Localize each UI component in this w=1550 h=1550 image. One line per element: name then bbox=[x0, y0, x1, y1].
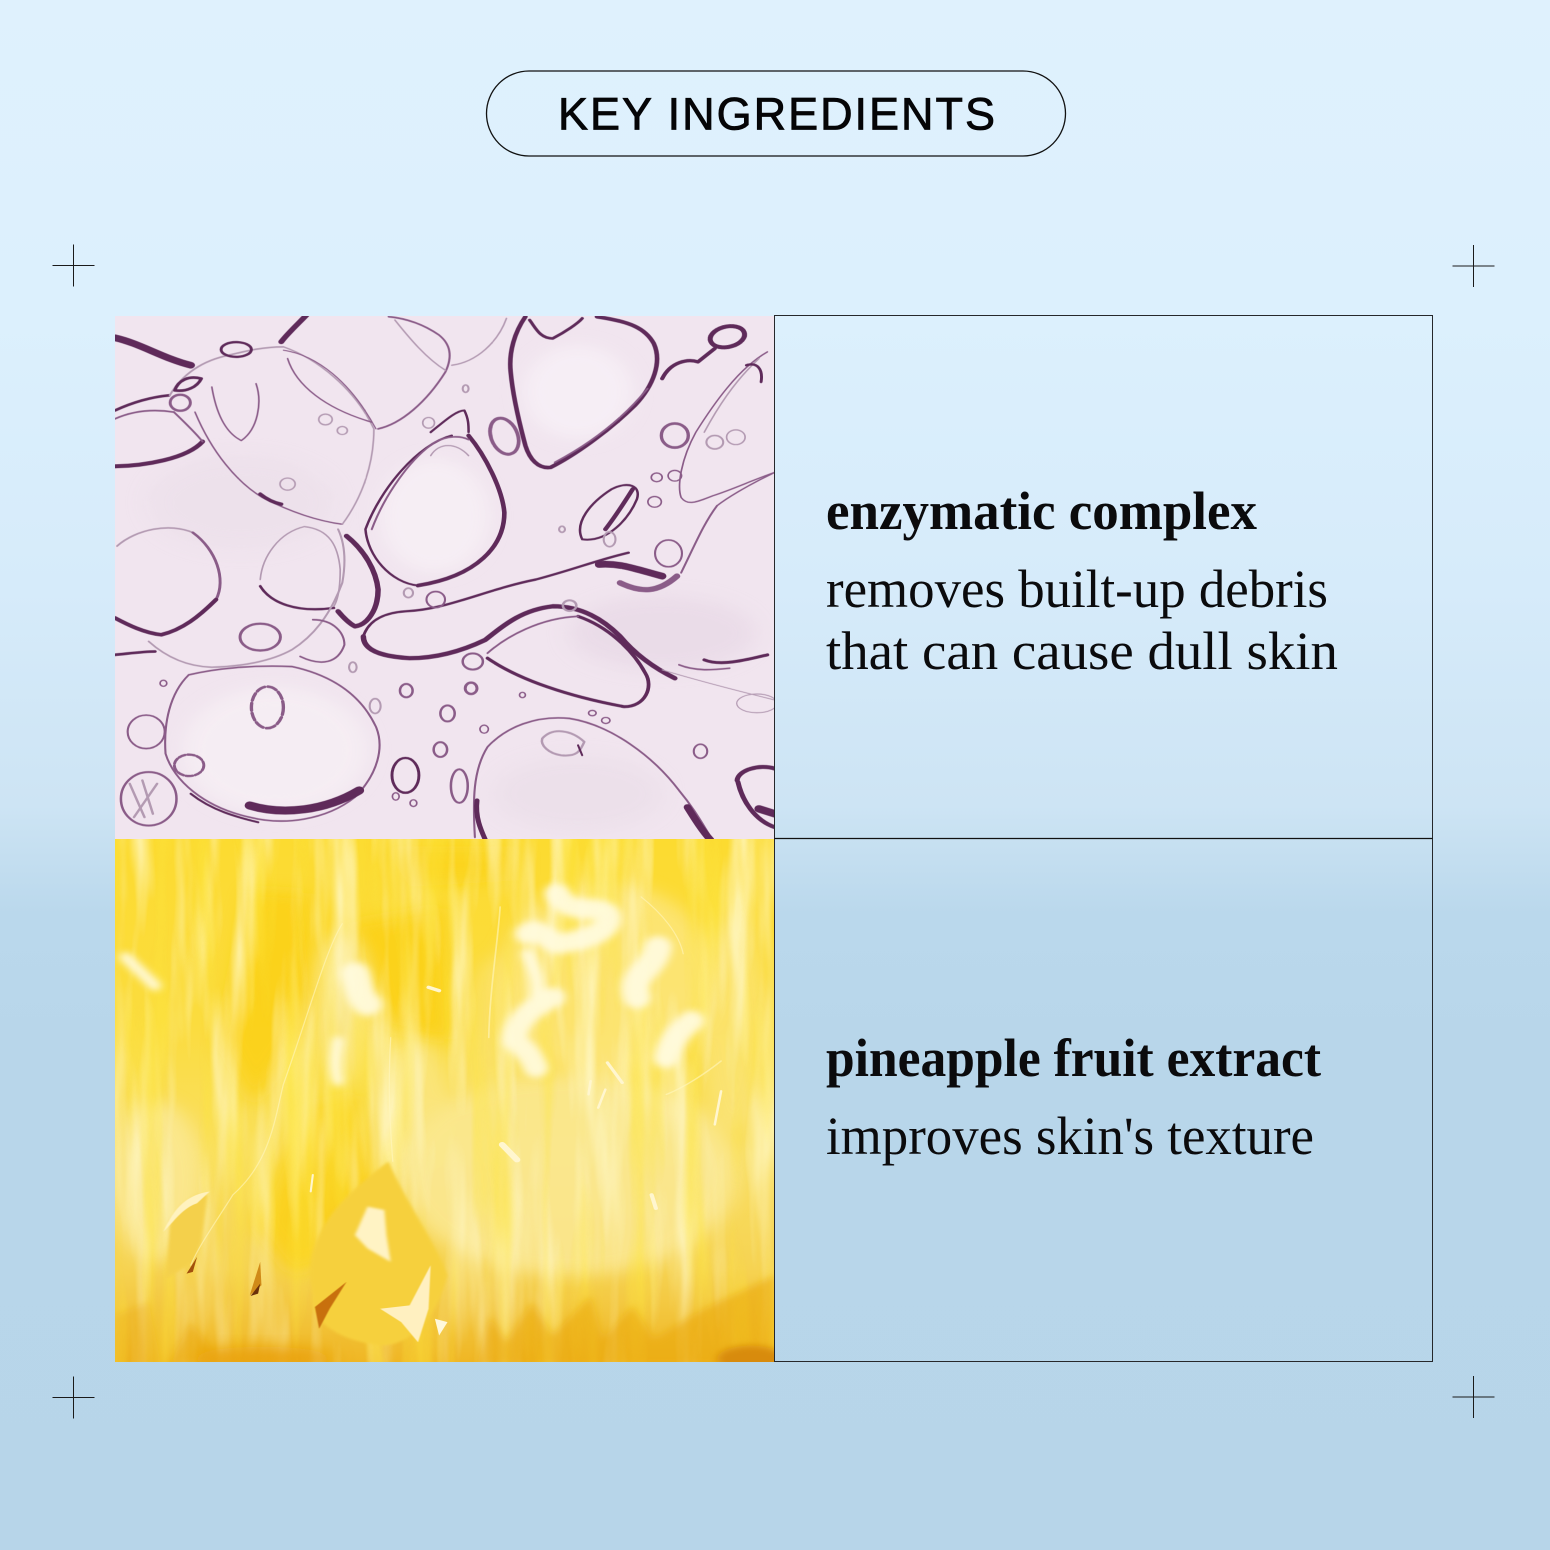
glints bbox=[311, 987, 721, 1208]
top-left streak and bubble bbox=[115, 338, 203, 466]
crescent between drops bbox=[338, 536, 378, 626]
top stone bubble bbox=[485, 317, 657, 468]
translucent fleshy tear bbox=[163, 1161, 448, 1346]
teardrop bubble lower centre bbox=[463, 600, 649, 707]
saturated yellow zones bbox=[217, 842, 524, 1278]
text block: pineapple fruit extract: improves skin's texture bbox=[826, 1106, 1314, 1166]
top centre bubble bbox=[281, 315, 506, 429]
bottom drip streaks bbox=[115, 1275, 775, 1365]
lower left large bubble bbox=[121, 666, 380, 826]
title pill: KEY INGREDIENTS bbox=[558, 88, 995, 140]
streak texture: pale fibres bbox=[115, 839, 775, 1363]
text block: enzymatic complex: that can cause dull skin bbox=[826, 621, 1338, 681]
panel frame: text cells bbox=[774, 316, 1432, 1362]
image panel: pineapple fruit bbox=[111, 839, 784, 1372]
text block: pineapple fruit extract bbox=[826, 1028, 1321, 1166]
icon: crosshair bottom left bbox=[52, 1376, 94, 1418]
streak texture: deep yellow fibres bbox=[115, 839, 775, 1363]
text block: enzymatic complex: enzymatic complex bbox=[826, 481, 1257, 541]
image panel: enzymatic complex bubbles bbox=[115, 315, 777, 840]
text block: pineapple fruit extract: pineapple fruit extract bbox=[826, 1028, 1321, 1088]
title pill bbox=[486, 71, 1066, 156]
large bubble upper left bbox=[170, 342, 376, 524]
top right droplets and bubble bbox=[648, 323, 775, 507]
text block: enzymatic complex: removes built-up debris bbox=[826, 559, 1328, 619]
slim drop right bbox=[580, 485, 638, 547]
icon: crosshair top left bbox=[52, 244, 94, 286]
long wavy bubble bbox=[363, 472, 777, 713]
small bubbles bbox=[160, 385, 707, 806]
icon: crosshair top right bbox=[1452, 245, 1494, 287]
text block: enzymatic complex bbox=[826, 481, 1338, 681]
left round bubbles bbox=[115, 527, 344, 667]
bottom right large bubble bbox=[474, 718, 775, 840]
fibre lines bbox=[191, 897, 721, 1265]
centre drop bubble bbox=[365, 410, 504, 586]
icon: crosshair bottom right bbox=[1452, 1376, 1494, 1418]
white marbled core bbox=[126, 894, 692, 1081]
pale flesh zones bbox=[111, 884, 767, 1275]
